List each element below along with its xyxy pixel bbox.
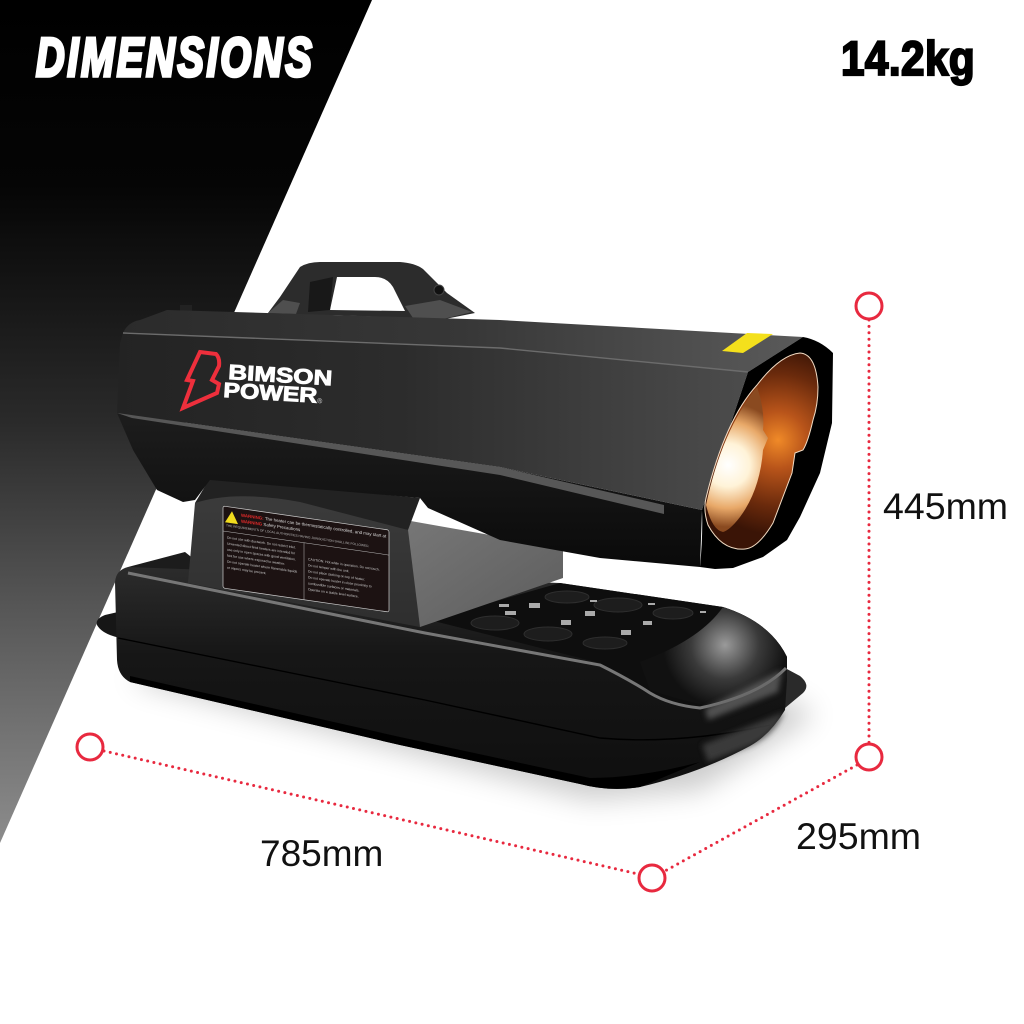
label intro: THE REQUIREMENTS OF LOCAL AUTHORITIES HAVING JURISDICTION SHALL BE FOLLOWED. xyxy=(226,523,369,548)
tank recessed circles xyxy=(471,591,693,649)
barrel top strip xyxy=(123,310,803,372)
handle inner ribs xyxy=(308,277,333,312)
barrel top knob xyxy=(180,305,192,311)
heater barrel xyxy=(117,305,833,569)
length line xyxy=(104,751,638,874)
dimension: height 445mm xyxy=(856,293,1008,743)
stand neck xyxy=(195,478,420,530)
tank end highlight xyxy=(705,670,782,720)
dimension: depth 295mm xyxy=(665,744,921,871)
logo mark xyxy=(183,352,219,408)
handle grip xyxy=(268,262,475,319)
heater product illustration xyxy=(97,262,833,789)
tank body xyxy=(115,567,787,789)
label right column: Do not operate heater in close proximity to xyxy=(308,575,372,589)
length right marker xyxy=(639,865,665,891)
yellow warning sticker xyxy=(722,333,773,353)
label left column: Unvented direct fired heaters are intended for xyxy=(227,542,296,556)
tank top edge highlight xyxy=(128,573,786,708)
barrel lower trim xyxy=(117,413,664,514)
tank lower highlight xyxy=(702,712,784,762)
label right column: Do not tamper with the unit. xyxy=(308,563,349,573)
safety precautions heading: WARNING Safety Precautions xyxy=(241,519,301,532)
brand logo xyxy=(183,352,333,408)
barrel lower housing xyxy=(117,413,702,567)
length left marker xyxy=(77,734,103,760)
logo text second line: POWER xyxy=(223,379,318,408)
label left column: use only in open spaces with good ventilation. xyxy=(227,548,296,562)
handle highlight xyxy=(268,300,472,319)
tank small highlights xyxy=(499,600,706,635)
stand front face xyxy=(188,496,420,627)
label left column: Do not use with ductwork. Do not restrict inlet. xyxy=(227,536,296,550)
carrying handle xyxy=(268,262,475,319)
tank right flange xyxy=(785,668,806,708)
length value: 785mm xyxy=(260,833,383,874)
barrel front rim xyxy=(700,337,833,569)
tank sheen xyxy=(640,607,787,705)
tank underside xyxy=(130,676,700,789)
label left column: Do not operate heater where flammable liquids xyxy=(227,560,298,574)
height top marker xyxy=(856,293,882,319)
barrel upper crease xyxy=(123,333,748,372)
tank top surface xyxy=(430,583,787,707)
label right column: Do not place clothing on top of heater. xyxy=(308,569,365,582)
barrel main panel xyxy=(117,333,748,510)
label right column: combustible surfaces or materials. xyxy=(308,581,359,593)
label left column: Not for use where exposed to weather. xyxy=(227,554,285,566)
background: dark diagonal wedge xyxy=(0,0,372,843)
burner opening xyxy=(705,353,818,549)
height line xyxy=(868,320,870,743)
weight label: 14.2kg xyxy=(841,31,975,86)
depth value: 295mm xyxy=(796,815,921,857)
registered mark: ® xyxy=(317,397,323,405)
label right column: CAUTION: Hot while in operation. Do not touch. xyxy=(308,557,380,572)
stand xyxy=(188,478,563,627)
depth line xyxy=(665,765,857,871)
logo text: BIMSON xyxy=(228,361,333,390)
tank back surface xyxy=(128,552,200,590)
depth marker xyxy=(856,744,882,770)
fuel tank xyxy=(97,552,806,789)
warning triangle xyxy=(225,510,238,524)
tank mid seam xyxy=(118,638,770,740)
label right column: Operate on a stable level surface. xyxy=(308,587,359,599)
handle bolt hole xyxy=(434,285,444,295)
ground shadow xyxy=(130,640,815,800)
label plate xyxy=(223,506,389,612)
title: DIMENSIONS xyxy=(36,28,312,89)
burner reflector glow xyxy=(706,387,768,532)
label left column: or vapors may be present. xyxy=(227,566,266,575)
dimension: length 785mm xyxy=(77,734,665,891)
warning heading: WARNING: The heater can be thermostatically controlled, and may start at xyxy=(241,513,387,539)
height value: 445mm xyxy=(883,485,1008,527)
warning label xyxy=(223,506,389,612)
tank left flange xyxy=(97,612,120,638)
stand side face xyxy=(405,520,563,627)
